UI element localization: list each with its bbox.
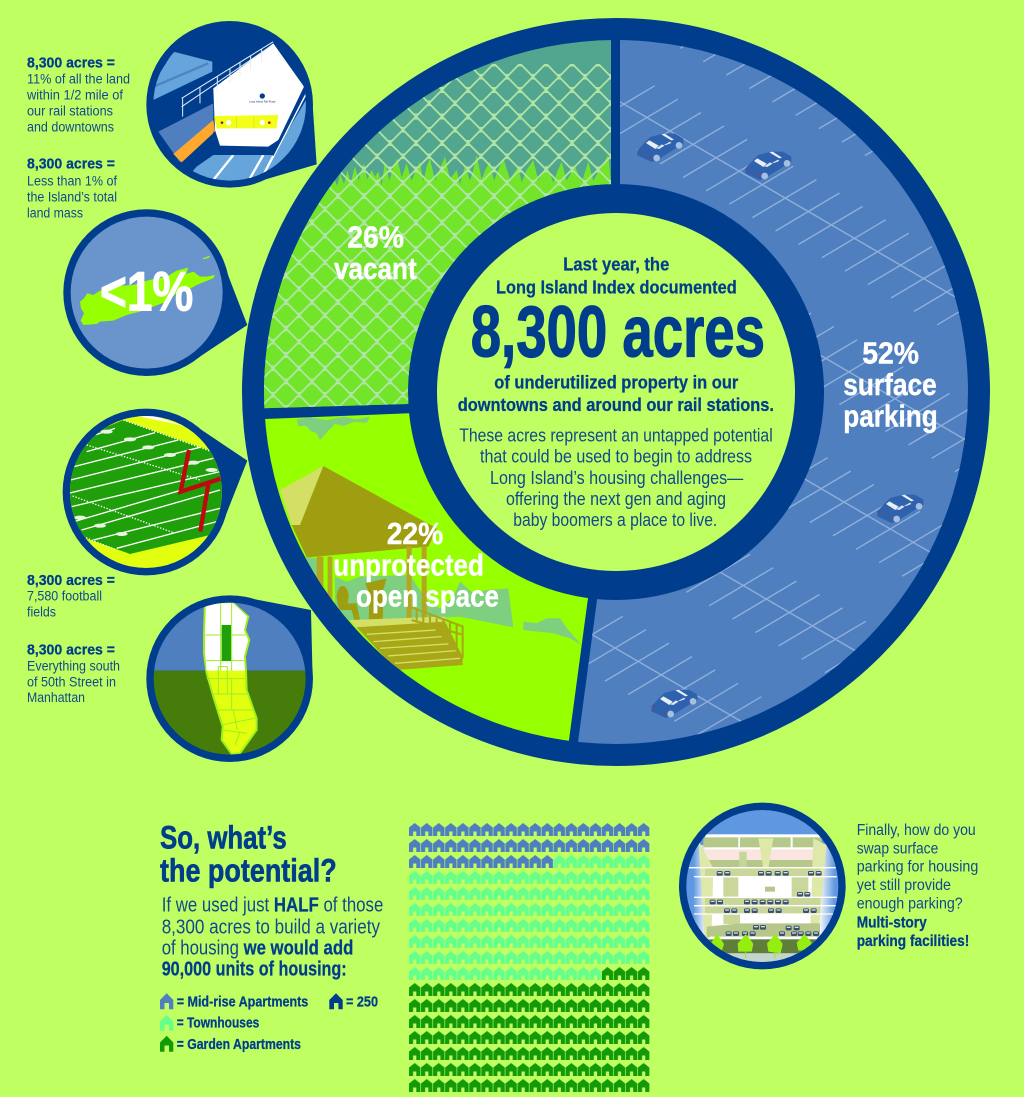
legend <box>160 993 378 1053</box>
text: Manhattan comparison: Manhattan <box>27 690 85 705</box>
text: rail stations comparison: within 1/2 mile of <box>26 88 123 102</box>
legend: = Townhouses <box>177 1016 259 1032</box>
text: island land mass comparison: land mass <box>27 205 83 220</box>
center text block: that could be used to begin to address <box>480 447 752 467</box>
label: 52% surface parking <box>843 335 938 434</box>
center text block: of underutilized property in our <box>494 371 738 392</box>
label: 22% unprotected open space <box>333 516 499 614</box>
callout icon: commuter train: Long Island Rail Road <box>249 100 276 104</box>
text: multi-story parking note: parking facilities! <box>857 933 969 950</box>
big number: 8,300 acres <box>471 293 765 373</box>
text: Manhattan comparison: 8,300 acres = <box>27 642 115 658</box>
label: 52% surface parking: 52% <box>862 335 919 370</box>
callout icon: Manhattan map <box>146 595 313 762</box>
text: island land mass comparison: the Island’s total <box>27 189 117 204</box>
text: multi-story parking note <box>857 822 978 950</box>
center text block: Last year, the <box>563 254 669 275</box>
legend: = Mid-rise Apartments <box>177 995 308 1011</box>
label: 52% surface parking: parking <box>843 399 938 434</box>
callout icon: Long Island map, less than 1% <box>63 209 247 376</box>
callout icon: football field <box>63 409 247 575</box>
donut chart: land use of 8,300 acres <box>242 18 990 766</box>
center text block: These acres represent an untapped potential <box>459 426 773 446</box>
label: 26% vacant: 26% <box>347 219 404 254</box>
vertical divider <box>611 30 620 190</box>
text: multi-story parking note: Finally, how do you <box>857 822 976 839</box>
text: rail stations comparison: 11% of all the land <box>27 72 130 86</box>
text: rail stations comparison: our rail stations <box>27 104 113 118</box>
text: rail stations comparison: and downtowns <box>27 120 114 134</box>
text: multi-story parking note: yet still provide <box>857 877 951 894</box>
callout icon: Long Island map, less than 1%: <1% <box>100 260 193 323</box>
center text block: Long Island’s housing challenges— <box>490 468 743 488</box>
label: 52% surface parking: surface <box>843 367 937 402</box>
legend: = Garden Apartments <box>177 1037 301 1053</box>
text: football fields comparison <box>27 573 115 620</box>
text: multi-story parking note: Multi-story <box>857 915 927 932</box>
text: island land mass comparison <box>27 157 117 220</box>
text block: housing potential: If we used just HALF of those <box>162 895 383 917</box>
center text block: downtowns and around our rail stations. <box>458 394 774 415</box>
text: Manhattan comparison: Everything south <box>27 659 120 674</box>
text: football fields comparison: 7,580 football <box>27 589 102 604</box>
center text block: offering the next gen and aging <box>506 489 726 509</box>
text: multi-story parking note: parking for housing <box>857 859 978 876</box>
segment: 22% unprotected open space <box>265 413 588 741</box>
label: 26% vacant: vacant <box>334 251 417 286</box>
outer navy ring <box>242 18 990 766</box>
label: 22% unprotected open space: 22% <box>387 516 443 551</box>
center text block: baby boomers a place to live. <box>513 510 717 530</box>
text: multi-story parking note: enough parking? <box>857 895 963 912</box>
center text block: Long Island Index documented <box>496 276 737 297</box>
text: Manhattan comparison <box>27 642 120 705</box>
center circle <box>437 213 795 571</box>
heading: So, what's the potential?: the potential? <box>160 853 337 889</box>
text: island land mass comparison: Less than 1% of <box>27 173 117 188</box>
text: multi-story parking note: swap surface <box>857 840 938 857</box>
text: Manhattan comparison: of 50th Street in <box>27 675 116 690</box>
text block: housing potential <box>162 895 383 981</box>
text block: housing potential: 90,000 units of housing: <box>162 959 347 981</box>
legend: = 250 <box>346 995 378 1011</box>
segment: 26% vacant <box>264 40 611 408</box>
label: 22% unprotected open space: unprotected <box>333 548 484 583</box>
segment: 52% surface parking <box>578 40 968 744</box>
text: rail stations comparison: 8,300 acres = <box>27 55 115 71</box>
text: rail stations comparison <box>26 55 130 134</box>
text block: housing potential: 8,300 acres to build a variety <box>162 916 380 938</box>
label: 26% vacant <box>334 219 417 286</box>
text: island land mass comparison: 8,300 acres = <box>27 157 115 173</box>
pictogram: housing units grid <box>409 823 650 1095</box>
heading: So, what's the potential? <box>160 819 337 889</box>
label: 22% unprotected open space: open space <box>356 579 499 614</box>
text block: housing potential: of housing we would add <box>162 937 353 959</box>
callout icon: multi-story parking facility <box>679 803 846 969</box>
callout icon: commuter train <box>146 21 317 188</box>
text: football fields comparison: 8,300 acres = <box>27 573 115 589</box>
center text block <box>458 254 774 530</box>
heading: So, what's the potential?: So, what’s <box>160 819 287 855</box>
text: football fields comparison: fields <box>27 605 56 620</box>
